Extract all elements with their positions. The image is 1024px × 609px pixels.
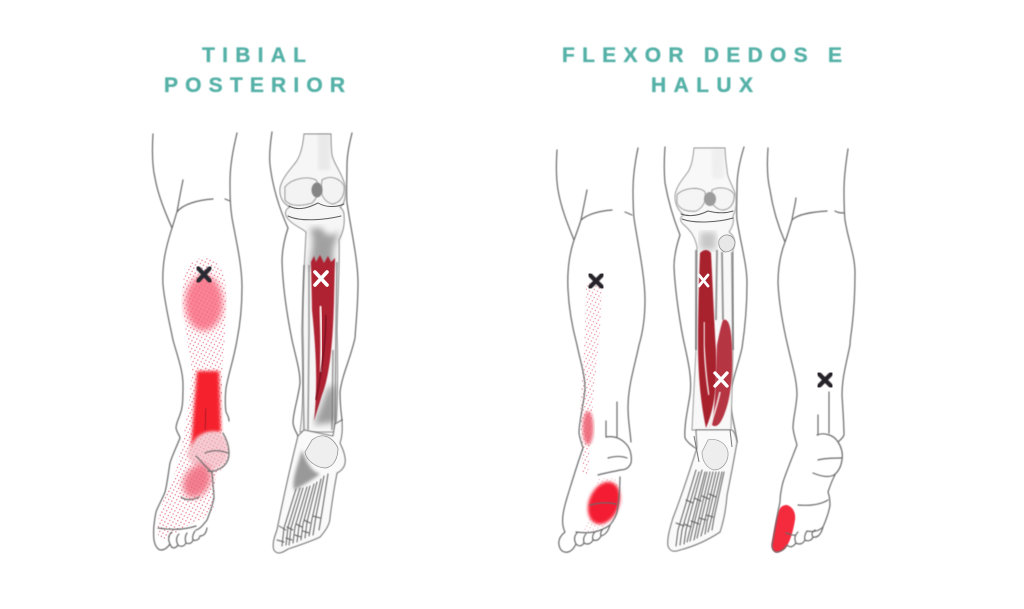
tendon crease line xyxy=(205,408,206,430)
femur, knee and tibia bones xyxy=(675,148,736,430)
red zone: lower calf xyxy=(191,371,221,450)
leg outline xyxy=(556,148,645,552)
red zone: sole xyxy=(582,477,626,529)
trigger point markers: white x xyxy=(699,275,727,386)
title: flexor dedos e halux: FLEXOR DEDOS E xyxy=(562,44,842,67)
foot bones xyxy=(668,430,737,551)
title: tibial posterior: POSTERIOR xyxy=(164,74,345,97)
panel: tibial posterior anatomy leg xyxy=(270,132,358,553)
leg outline xyxy=(767,148,855,552)
stippled forefoot edge xyxy=(582,478,618,532)
red zone: lower calf xyxy=(582,411,594,445)
stippled referred pain column xyxy=(580,283,602,474)
red zone: heel pale patch xyxy=(187,432,228,470)
muscle: flexor hallucis xyxy=(699,320,732,462)
red zone: midfoot xyxy=(177,459,217,503)
trigger point marker: black x xyxy=(198,268,210,281)
muscle: flexor digitorum xyxy=(698,250,716,428)
panel: flexor dedos anatomy leg xyxy=(664,147,747,551)
title: flexor dedos e halux xyxy=(562,44,842,97)
leg outline xyxy=(270,132,358,436)
panel: flexor dedos pain map leg xyxy=(556,148,645,552)
foot bones xyxy=(273,420,345,553)
leg outline xyxy=(152,133,242,550)
leg outline xyxy=(664,147,747,449)
femur, knee and tibia bones xyxy=(280,134,345,432)
title: tibial posterior xyxy=(164,44,345,97)
panel: flexor halux pain map leg xyxy=(767,148,855,552)
panel: tibial posterior pain map leg xyxy=(152,133,242,550)
title: flexor dedos e halux: HALUX xyxy=(651,74,753,97)
trigger point marker: black x xyxy=(590,275,602,287)
red zone: big toe xyxy=(772,505,795,552)
trigger point marker: white x xyxy=(315,272,327,285)
title: tibial posterior: TIBIAL xyxy=(202,44,306,67)
trigger point marker: black x xyxy=(819,374,831,386)
red zone: upper calf xyxy=(185,275,223,331)
stippled referred pain area xyxy=(158,258,228,539)
muscle: tibialis posterior xyxy=(311,255,336,425)
